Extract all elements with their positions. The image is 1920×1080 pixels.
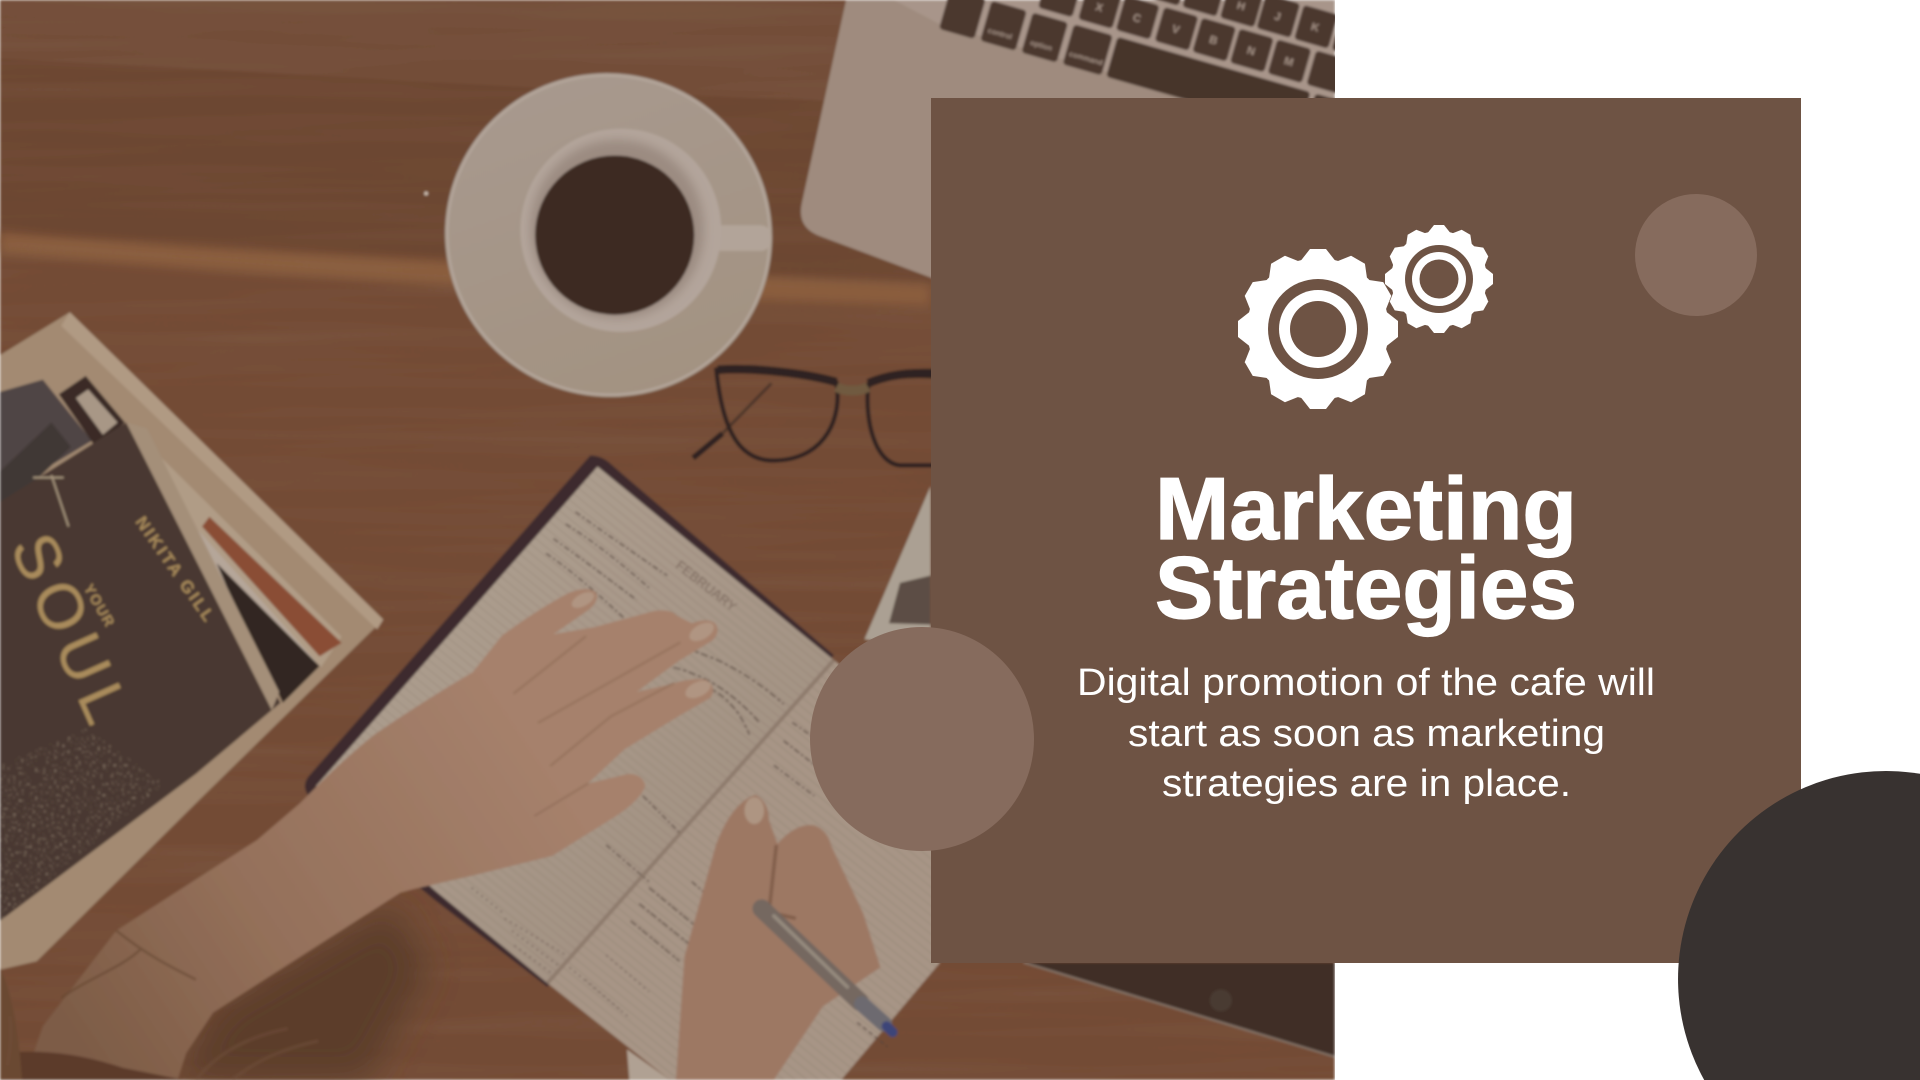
title [1155,459,1577,637]
key legends: H [1235,0,1246,13]
decorative circle: top right of panel [1635,194,1757,316]
open notebook [305,456,980,1080]
month heading: FEBRUARY [673,557,740,614]
background photo: desk with coffee, books, notebook and hands [0,0,1378,1080]
decorative circle: overlapping photo and panel [810,627,1034,851]
small paper behind notebook [864,486,931,649]
key legends: B [1208,34,1219,48]
dark tablet under panel [1024,962,1335,1057]
decorative circle: dark bottom right [1678,771,1920,1080]
pen [762,909,893,1032]
eyeglasses [693,369,949,465]
icon: gears [1238,225,1493,409]
book cover title: NIKITA GILL [131,512,220,627]
brown content panel [931,98,1801,963]
coffee cup and saucer [443,71,774,399]
key legends: X [1094,1,1105,15]
body text [1077,662,1655,805]
body text: Digital promotion of the cafe will [1077,662,1655,704]
small gear [1385,225,1493,333]
stack of books [0,312,383,970]
large gear [1238,249,1398,409]
handwriting and ruled lines [471,512,888,1047]
person's hair [0,967,318,1080]
key legends [986,0,1320,68]
key legends: N [1245,45,1256,58]
book cover title: SOUL [0,523,146,742]
laptop [801,0,1378,429]
right hand holding pen [676,795,880,1080]
key legends: K [1310,21,1321,35]
wooden desk [0,0,1335,1080]
key legends: C [1131,12,1142,26]
dark shadow area below arm [178,906,429,1080]
body text: strategies are in place. [1162,763,1571,805]
title: Strategies [1155,538,1577,637]
key legends: command [1068,49,1104,67]
title: Marketing [1155,459,1577,558]
book cover title: YOUR [80,582,117,631]
book cover title [14,474,212,728]
key legends: option [1029,38,1054,53]
key legends: control [987,26,1013,41]
key legends: M [1283,55,1295,69]
fold of skin at hand on chin [61,931,196,998]
key legends: V [1170,23,1181,37]
keyboard keys [938,0,1335,98]
left hand resting on page, with arm [24,589,718,1080]
body text: start as soon as marketing [1128,713,1605,755]
key legends: J [1273,10,1282,24]
